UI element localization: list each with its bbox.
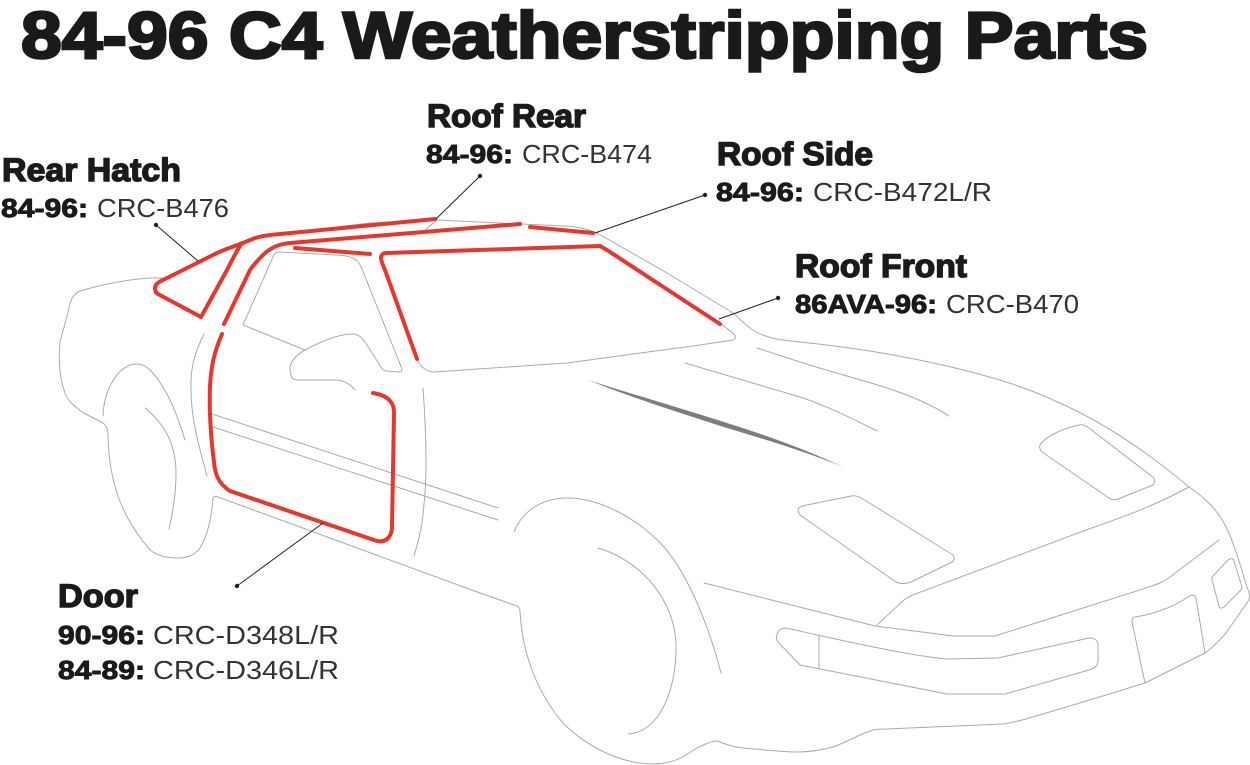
label: door	[58, 578, 339, 685]
weatherstrip: rear hatch	[155, 219, 435, 317]
weatherstrip: door	[210, 334, 394, 541]
label: roof front	[795, 248, 1079, 319]
title: 84-96 C4 Weatherstripping Parts	[21, 0, 1148, 72]
label: roof side: 84-96:	[716, 177, 804, 207]
label: door: CRC-D348L/R	[153, 620, 339, 650]
label: rear hatch: Rear Hatch	[2, 152, 181, 188]
label: door: CRC-D346L/R	[153, 655, 339, 685]
label: rear hatch	[1, 152, 229, 223]
weatherstrip: door top rail	[295, 248, 370, 254]
label: roof side: CRC-B472L/R	[813, 177, 992, 207]
car outline illustration	[59, 220, 1249, 764]
label: roof front: CRC-B470	[946, 289, 1079, 319]
label: roof front: Roof Front	[795, 248, 967, 284]
label: door: Door	[58, 578, 138, 614]
hood crease highlight	[588, 380, 843, 467]
label: roof rear: CRC-B474	[522, 139, 652, 169]
weatherstrip: roof rear	[224, 224, 520, 324]
weatherstrip: roof side	[530, 227, 593, 233]
label: roof rear: Roof Rear	[427, 98, 586, 134]
weatherstrip: roof front	[381, 246, 720, 359]
leader: door	[235, 523, 323, 588]
label: roof front: 86AVA-96:	[795, 289, 937, 319]
label: rear hatch: 84-96:	[1, 193, 88, 223]
leader: roof side	[595, 193, 707, 233]
label: roof rear: 84-96:	[426, 139, 513, 169]
label: door: 90-96:	[58, 620, 145, 650]
leader: roof rear	[436, 174, 482, 219]
label: roof side	[716, 136, 992, 207]
label: roof rear	[426, 98, 652, 169]
label: door: 84-89:	[58, 655, 145, 685]
label: roof side: Roof Side	[717, 136, 873, 172]
leader: rear hatch	[154, 223, 198, 261]
leader: roof front	[719, 296, 780, 319]
label: rear hatch: CRC-B476	[97, 193, 229, 223]
